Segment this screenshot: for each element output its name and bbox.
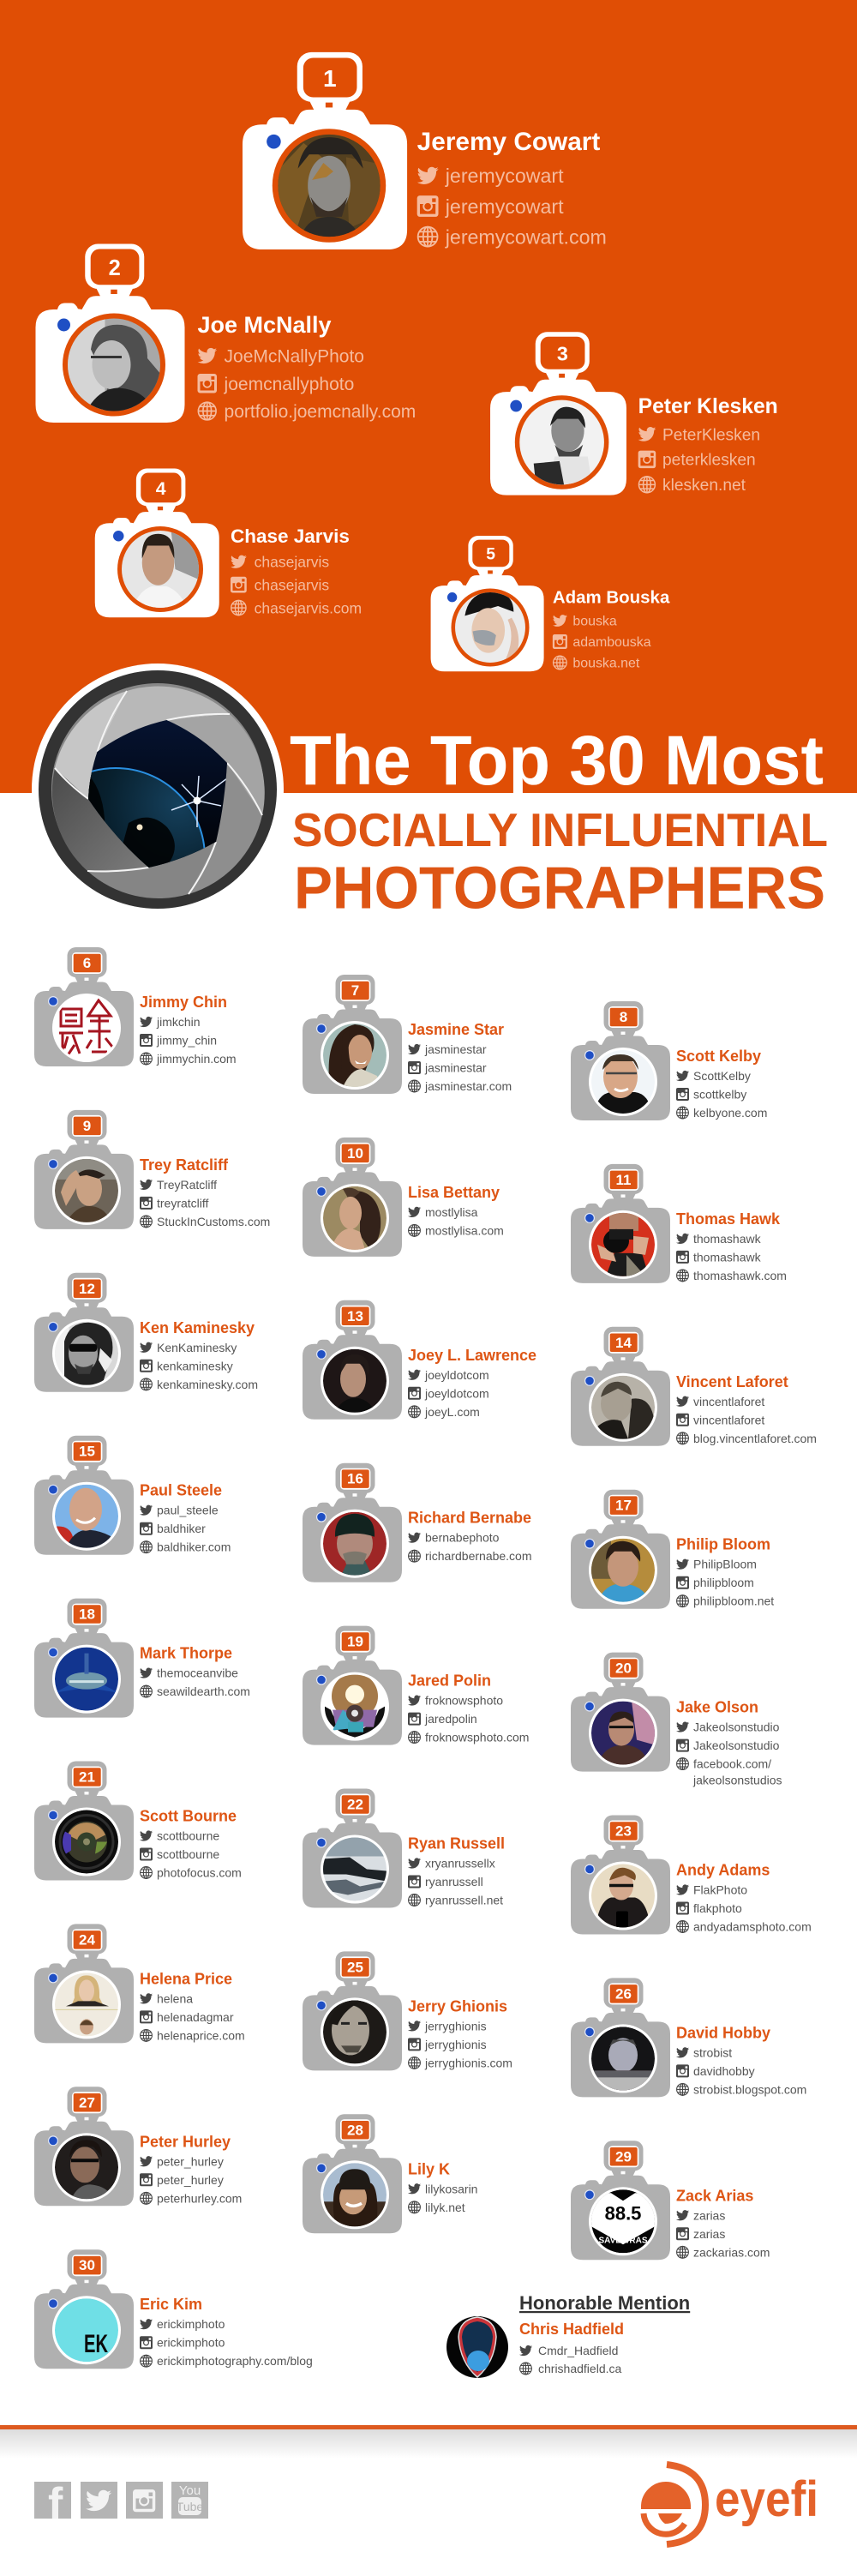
social handles: baldhiker bbox=[157, 1522, 206, 1535]
social handles: baldhiker.com bbox=[157, 1540, 231, 1554]
social handles: helena bbox=[157, 1991, 193, 2005]
social handles: flakphoto bbox=[693, 1901, 742, 1915]
social handles bbox=[553, 615, 651, 671]
photo bbox=[55, 2298, 118, 2362]
social handles bbox=[676, 1069, 767, 1120]
icon: instagram bbox=[126, 2482, 163, 2519]
camera 19: Jared Polin bbox=[303, 1626, 529, 1745]
photo bbox=[591, 1050, 655, 1114]
social handles bbox=[140, 1015, 237, 1066]
badge number: 7 bbox=[351, 982, 359, 999]
social handles bbox=[140, 1504, 231, 1554]
social handles: xryanrussellx bbox=[425, 1857, 495, 1870]
icon: youtube: You bbox=[179, 2483, 201, 2498]
social handles bbox=[676, 1232, 787, 1282]
photo bbox=[55, 2135, 118, 2199]
social handles bbox=[408, 2182, 477, 2214]
photo bbox=[591, 1212, 655, 1276]
name: Helena Price bbox=[140, 1970, 232, 1987]
camera 21: Scott Bourne bbox=[34, 1761, 242, 1881]
name: Jake Olson bbox=[676, 1699, 758, 1716]
social handles bbox=[519, 2344, 621, 2375]
social handles bbox=[231, 554, 362, 616]
title bbox=[290, 722, 828, 921]
photo bbox=[591, 2027, 655, 2090]
social handles: TreyRatcliff bbox=[157, 1178, 217, 1192]
social handles: klesken.net bbox=[662, 477, 746, 495]
camera 8: Scott Kelby bbox=[571, 1001, 767, 1120]
camera 25: Jerry Ghionis bbox=[303, 1951, 512, 2070]
camera 27: Peter Hurley bbox=[34, 2087, 242, 2206]
title: PHOTOGRAPHERS bbox=[294, 854, 825, 921]
icon: youtube: Tube bbox=[177, 2500, 203, 2513]
name: Andy Adams bbox=[676, 1862, 770, 1879]
social handles: jimmychin.com bbox=[156, 1052, 237, 1066]
honorable mention bbox=[446, 2292, 690, 2378]
social handles: KenKaminesky bbox=[157, 1341, 237, 1354]
social handles: jasminestar bbox=[424, 1042, 487, 1056]
badge number: 19 bbox=[347, 1634, 363, 1650]
name: Thomas Hawk bbox=[676, 1210, 781, 1228]
social handles: chasejarvis.com bbox=[255, 599, 362, 616]
badge number: 28 bbox=[347, 2122, 363, 2138]
badge number: 3 bbox=[557, 343, 568, 365]
camera 10: Lisa Bettany bbox=[303, 1138, 504, 1257]
social handles: paul_steele bbox=[157, 1504, 219, 1517]
name: Scott Kelby bbox=[676, 1048, 761, 1065]
badge number: 14 bbox=[615, 1335, 632, 1351]
photo bbox=[591, 2189, 655, 2253]
social handles: davidhobby bbox=[693, 2064, 755, 2078]
social handles: photofocus.com bbox=[157, 1865, 242, 1879]
name: Joey L. Lawrence bbox=[408, 1347, 536, 1364]
social handles bbox=[140, 2317, 313, 2368]
social handles: PeterKlesken bbox=[662, 426, 760, 444]
social handles: Jakeolsonstudio bbox=[693, 1738, 780, 1752]
social handles: erickimphoto bbox=[157, 2336, 225, 2350]
badge number: 8 bbox=[620, 1009, 627, 1025]
camera 22: Ryan Russell bbox=[303, 1788, 505, 1908]
social handles: erickimphoto bbox=[157, 2317, 225, 2331]
title: SOCIALLY INFLUENTIAL bbox=[292, 803, 828, 856]
name: Peter Klesken bbox=[638, 395, 778, 418]
photo bbox=[55, 1159, 118, 1222]
social handles: joemcnallyphoto bbox=[224, 375, 354, 394]
photo bbox=[55, 1973, 118, 2036]
camera 24: Helena Price bbox=[34, 1924, 245, 2043]
camera 2: Joe McNally bbox=[36, 243, 416, 423]
social handles: peterklesken bbox=[662, 452, 756, 470]
social handles: joeyL.com bbox=[424, 1405, 480, 1419]
footer divider line bbox=[0, 2425, 857, 2429]
social handles: vincentlaforet bbox=[693, 1413, 764, 1426]
name: Richard Bernabe bbox=[408, 1510, 531, 1527]
badge number: 25 bbox=[347, 1959, 363, 1975]
badge number: 9 bbox=[83, 1118, 91, 1134]
camera 29: Zack Arias bbox=[571, 2141, 770, 2260]
name: Jasmine Star bbox=[408, 1021, 504, 1038]
camera 1: Jeremy Cowart bbox=[243, 52, 607, 249]
photo bbox=[323, 1838, 387, 1901]
social handles bbox=[140, 2154, 242, 2205]
name: Philip Bloom bbox=[676, 1536, 770, 1553]
social handles: peter_hurley bbox=[157, 2154, 224, 2168]
social handles: helenaprice.com bbox=[157, 2028, 245, 2042]
name: Lisa Bettany bbox=[408, 1184, 500, 1201]
icon: facebook: f bbox=[48, 2479, 63, 2529]
name: Trey Ratcliff bbox=[140, 1156, 229, 1174]
social handles: PhilipBloom bbox=[693, 1558, 757, 1571]
camera 17: Philip Bloom bbox=[571, 1490, 774, 1609]
badge number: 17 bbox=[615, 1498, 632, 1514]
social handles bbox=[408, 1368, 489, 1419]
name: Joe McNally bbox=[197, 312, 332, 338]
social handles: thomashawk bbox=[693, 1232, 762, 1246]
social handles: jakeolsonstudios bbox=[692, 1774, 782, 1787]
badge number: 6 bbox=[83, 955, 91, 971]
social handles bbox=[140, 1991, 245, 2042]
logo wordmark: eyefi bbox=[715, 2471, 818, 2527]
social handles: jeremycowart bbox=[445, 195, 564, 218]
social handles: lilykosarin bbox=[425, 2182, 477, 2195]
social handles: jimmy_chin bbox=[156, 1034, 217, 1048]
social handles: chrishadfield.ca bbox=[538, 2362, 621, 2375]
icon: youtube bbox=[171, 2482, 208, 2519]
name: Paul Steele bbox=[140, 1482, 222, 1499]
camera 9: Trey Ratcliff bbox=[34, 1110, 270, 1229]
social handles: bernabephoto bbox=[425, 1531, 500, 1545]
social handles bbox=[676, 1395, 817, 1445]
camera 26: David Hobby bbox=[571, 1978, 806, 2097]
camera 20: Jake Olson bbox=[571, 1653, 782, 1787]
social handles: kenkaminesky bbox=[157, 1359, 233, 1372]
social handles bbox=[140, 1829, 242, 1879]
badge number: 29 bbox=[615, 2148, 632, 2165]
photo bbox=[518, 399, 605, 486]
social handles: joeyldotcom bbox=[424, 1368, 489, 1382]
photo: mission badge bbox=[446, 2316, 508, 2378]
social handles: scottbourne bbox=[157, 1829, 219, 1843]
badge number: 30 bbox=[79, 2257, 95, 2273]
badge number: 10 bbox=[347, 1145, 363, 1162]
badge number: 23 bbox=[615, 1822, 632, 1840]
name: Chris Hadfield bbox=[519, 2321, 624, 2338]
social handles bbox=[140, 1341, 258, 1391]
badge number: 24 bbox=[79, 1931, 95, 1948]
photo bbox=[59, 998, 113, 1054]
badge number: 13 bbox=[347, 1308, 363, 1324]
camera 7: Jasmine Star bbox=[303, 975, 512, 1094]
social handles: helenadagmar bbox=[157, 2010, 234, 2024]
photo bbox=[591, 1539, 655, 1602]
footer gradient bbox=[0, 2429, 857, 2459]
name: David Hobby bbox=[676, 2024, 770, 2041]
social handles: jasminestar.com bbox=[424, 1079, 512, 1093]
social handles bbox=[676, 2208, 770, 2259]
icon: twitter bbox=[81, 2482, 117, 2519]
name: Scott Bourne bbox=[140, 1807, 237, 1824]
social handles: erickimphotography.com/blog bbox=[157, 2354, 313, 2368]
name: Lily K bbox=[408, 2160, 450, 2177]
social handles: strobist.blogspot.com bbox=[693, 2082, 806, 2096]
social handles: mostlylisa bbox=[425, 1205, 478, 1219]
photo bbox=[591, 1376, 655, 1439]
camera 14: Vincent Laforet bbox=[571, 1327, 817, 1446]
badge number: 4 bbox=[156, 478, 166, 499]
social handles: scottkelby bbox=[693, 1087, 746, 1101]
photo bbox=[323, 1024, 387, 1087]
social handles bbox=[408, 2019, 512, 2069]
social handles: jimkchin bbox=[156, 1015, 201, 1029]
eyefi logo bbox=[644, 2465, 818, 2544]
social handles: kenkaminesky.com bbox=[157, 1378, 258, 1391]
name: Jared Polin bbox=[408, 1672, 491, 1690]
photo bbox=[323, 2163, 387, 2227]
social handles: Jakeolsonstudio bbox=[693, 1720, 780, 1734]
social handles bbox=[408, 1694, 529, 1744]
camera 5: Adam Bouska bbox=[431, 536, 670, 671]
name: Zack Arias bbox=[676, 2187, 753, 2204]
social handles: kelbyone.com bbox=[693, 1106, 767, 1120]
social handles: andyadamsphoto.com bbox=[693, 1920, 812, 1934]
social handles bbox=[140, 1666, 250, 1698]
social handles: strobist bbox=[693, 2045, 732, 2059]
photo: SAVEWRAS bbox=[598, 2236, 648, 2245]
social handles bbox=[676, 2045, 806, 2096]
photo bbox=[591, 1864, 655, 1927]
social handles: facebook.com/ bbox=[693, 1757, 771, 1771]
photo bbox=[277, 133, 381, 238]
social handles: jerryghionis bbox=[424, 2038, 487, 2051]
camera 11: Thomas Hawk bbox=[571, 1164, 787, 1283]
social handles bbox=[140, 1178, 270, 1228]
social handles: StuckInCustoms.com bbox=[157, 1215, 270, 1228]
social handles: JoeMcNallyPhoto bbox=[225, 346, 364, 367]
name: Ryan Russell bbox=[408, 1834, 505, 1852]
social handles: zarias bbox=[693, 2227, 725, 2241]
heading: Honorable Mention bbox=[519, 2292, 690, 2314]
photo: EK bbox=[84, 2330, 108, 2358]
camera 15: Paul Steele bbox=[34, 1436, 231, 1555]
header background bbox=[0, 0, 857, 793]
name: Jimmy Chin bbox=[140, 994, 227, 1011]
photo: 88.5 bbox=[605, 2202, 641, 2224]
badge number: 18 bbox=[79, 1606, 95, 1623]
camera 12: Ken Kaminesky bbox=[34, 1273, 258, 1392]
name: Eric Kim bbox=[140, 2296, 202, 2313]
photo bbox=[121, 530, 200, 609]
social handles: vincentlaforet bbox=[693, 1395, 764, 1408]
social handles: philipbloom.net bbox=[693, 1594, 774, 1608]
name: Chase Jarvis bbox=[231, 525, 350, 547]
photo bbox=[323, 2000, 387, 2063]
social handles: thomashawk bbox=[693, 1250, 762, 1264]
social handles bbox=[676, 1720, 782, 1787]
camera 16: Richard Bernabe bbox=[303, 1463, 532, 1582]
name: Jerry Ghionis bbox=[408, 1997, 507, 2015]
camera 28: Lily K bbox=[303, 2114, 477, 2233]
camera 3: Peter Klesken bbox=[490, 332, 778, 495]
social handles bbox=[676, 1558, 774, 1608]
icon: facebook bbox=[34, 2479, 71, 2529]
social handles: jeremycowart.com bbox=[445, 225, 607, 248]
badge number: 12 bbox=[79, 1281, 95, 1297]
social handles: froknowsphoto bbox=[425, 1694, 503, 1708]
social handles: jeremycowart bbox=[445, 165, 564, 187]
social handles: thomashawk.com bbox=[693, 1269, 787, 1282]
name: Peter Hurley bbox=[140, 2133, 231, 2150]
social handles: chasejarvis bbox=[255, 553, 329, 570]
social handles: jaredpolin bbox=[424, 1712, 477, 1726]
social handles: adambouska bbox=[572, 635, 651, 650]
social handles: seawildearth.com bbox=[157, 1684, 250, 1698]
badge number: 26 bbox=[615, 1985, 632, 2002]
name: Adam Bouska bbox=[553, 588, 670, 608]
social handles bbox=[408, 1205, 504, 1237]
camera 23: Andy Adams bbox=[571, 1816, 812, 1934]
name: Mark Thorpe bbox=[140, 1645, 232, 1662]
social handles: zackarias.com bbox=[693, 2245, 770, 2259]
social handles: themoceanvibe bbox=[157, 1666, 238, 1680]
photo bbox=[55, 1810, 118, 1874]
camera 4: Chase Jarvis bbox=[95, 468, 362, 617]
badge number: 15 bbox=[79, 1444, 95, 1460]
social handles: jasminestar bbox=[424, 1061, 487, 1075]
badge number: 11 bbox=[616, 1172, 631, 1188]
social handles bbox=[676, 1882, 812, 1934]
name: Jeremy Cowart bbox=[417, 128, 600, 156]
lens aperture graphic bbox=[32, 664, 284, 909]
social handles bbox=[408, 1042, 512, 1093]
photo bbox=[323, 1186, 387, 1250]
social handles: ryanrussell bbox=[425, 1875, 483, 1888]
social handles: joeyldotcom bbox=[424, 1386, 489, 1400]
social handles: Cmdr_Hadfield bbox=[538, 2344, 618, 2357]
social handles: scottbourne bbox=[157, 1847, 219, 1861]
social handles: mostlylisa.com bbox=[425, 1223, 504, 1237]
badge number: 1 bbox=[323, 65, 337, 92]
badge number: 22 bbox=[347, 1797, 363, 1812]
social handles bbox=[408, 1531, 532, 1563]
social handles: lilyk.net bbox=[425, 2201, 465, 2214]
photo bbox=[55, 1485, 118, 1548]
badge number: 2 bbox=[109, 256, 121, 280]
social handles: peter_hurley bbox=[157, 2173, 224, 2187]
photo bbox=[454, 591, 526, 664]
title: The Top 30 Most bbox=[290, 722, 824, 800]
photo bbox=[323, 1349, 387, 1413]
photo bbox=[323, 1673, 387, 1738]
social handles bbox=[197, 346, 416, 422]
social handles: philipbloom bbox=[693, 1576, 754, 1589]
social handles: zarias bbox=[693, 2208, 725, 2222]
badge number: 20 bbox=[615, 1660, 632, 1677]
social handles: froknowsphoto.com bbox=[425, 1731, 529, 1744]
camera 6: Jimmy Chin bbox=[34, 947, 237, 1066]
social handles bbox=[408, 1857, 503, 1906]
photo bbox=[55, 1648, 118, 1711]
social handles: portfolio.joemcnally.com bbox=[225, 402, 416, 422]
social handles: chasejarvis bbox=[255, 576, 329, 593]
social handles: ryanrussell.net bbox=[425, 1893, 503, 1906]
photo bbox=[591, 1702, 655, 1765]
name: Vincent Laforet bbox=[676, 1373, 788, 1390]
logo mark bbox=[644, 2465, 705, 2544]
photo bbox=[67, 317, 161, 412]
social handles bbox=[417, 165, 607, 248]
photo bbox=[55, 1322, 118, 1385]
social handles: jerryghionis.com bbox=[424, 2056, 512, 2069]
badge number: 27 bbox=[79, 2094, 95, 2111]
social handles bbox=[638, 426, 760, 495]
badge number: 16 bbox=[347, 1471, 363, 1487]
social handles: treyratcliff bbox=[157, 1196, 209, 1210]
social handles: jerryghionis bbox=[424, 2019, 487, 2033]
footer social icons bbox=[34, 2479, 208, 2529]
camera 18: Mark Thorpe bbox=[34, 1599, 250, 1718]
name: Ken Kaminesky bbox=[140, 1319, 255, 1336]
social handles: richardbernabe.com bbox=[425, 1549, 532, 1563]
social handles: ScottKelby bbox=[693, 1069, 751, 1083]
social handles: peterhurley.com bbox=[157, 2191, 242, 2205]
social handles: FlakPhoto bbox=[693, 1882, 747, 1896]
badge number: 5 bbox=[486, 545, 495, 564]
camera 30: Eric Kim bbox=[34, 2249, 313, 2369]
social handles: blog.vincentlaforet.com bbox=[693, 1432, 817, 1445]
social handles: bouska bbox=[572, 615, 617, 629]
camera 13: Joey L. Lawrence bbox=[303, 1300, 536, 1420]
social handles: bouska.net bbox=[572, 657, 640, 671]
photo bbox=[323, 1512, 387, 1576]
badge number: 21 bbox=[79, 1769, 95, 1785]
